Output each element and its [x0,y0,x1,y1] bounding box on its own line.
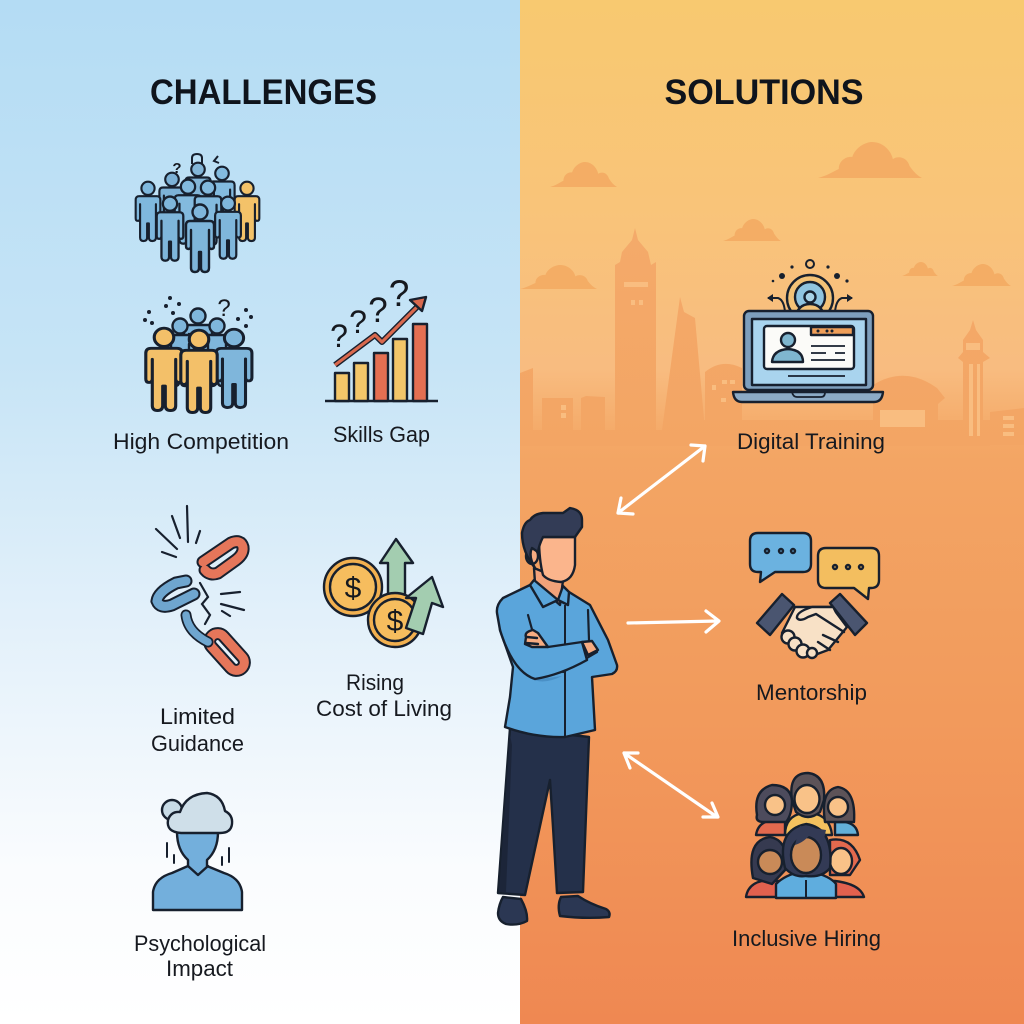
shoes [498,896,610,925]
icon: broken chain [156,506,248,674]
face [539,537,575,582]
icon: skills gap chart: ? [389,273,409,314]
icon: crowd with questions: ? [172,160,182,177]
arrow: to mentorship [628,611,719,632]
icon: inclusive hiring group [746,773,864,898]
icon: skills gap chart: ? [330,318,348,354]
icon: high competition people [143,295,253,413]
icon: rising cost coins: $ [387,605,404,638]
label: psychological impact [134,931,266,981]
icon: rising cost coins: $ [345,572,362,605]
hand right [582,641,598,655]
hand left [525,630,548,647]
heading: challenges: CHALLENGES [150,73,377,112]
label: psychological impact: Psychological [134,931,266,956]
icon: high competition people: ? [217,295,231,322]
arrow: to digital training [618,445,705,514]
heading: solutions: SOLUTIONS [664,73,864,112]
label: limited guidance [151,704,244,756]
label: limited guidance: Guidance [151,731,244,756]
label: rising cost of living [316,670,452,721]
icon: crowd with questions [136,154,259,272]
panel: solutions background [520,0,1024,1024]
icon: skills gap chart: ? [349,304,367,340]
arrow: to inclusive hiring [624,753,718,817]
label: psychological impact: Impact [166,956,233,981]
label: digital training: Digital Training [737,429,885,454]
icon: mentorship handshake [750,533,879,658]
icon: digital training laptop [733,260,883,402]
ear [526,548,538,564]
label: high competition: High Competition [113,429,289,454]
icon: skills gap chart: ? [368,291,388,330]
label: rising cost of living: Rising [346,670,404,695]
label: mentorship: Mentorship [756,680,867,705]
label: rising cost of living: Cost of Living [316,696,452,721]
neck [534,568,563,605]
icon: rising cost coins [324,539,443,647]
panel: challenges background [0,0,520,1024]
collar [530,580,569,607]
hair [522,508,582,568]
shirt [497,585,617,737]
central figure: man with crossed arms [497,508,617,925]
icon: skills gap chart [325,273,438,401]
icon: psychological impact [153,793,242,910]
crossed forearm [500,630,587,679]
label: inclusive hiring: Inclusive Hiring [732,926,881,951]
label: skills gap: Skills Gap [333,422,430,447]
label: limited guidance: Limited [160,704,235,729]
pants [498,728,589,895]
city skyline and clouds [520,142,1024,446]
